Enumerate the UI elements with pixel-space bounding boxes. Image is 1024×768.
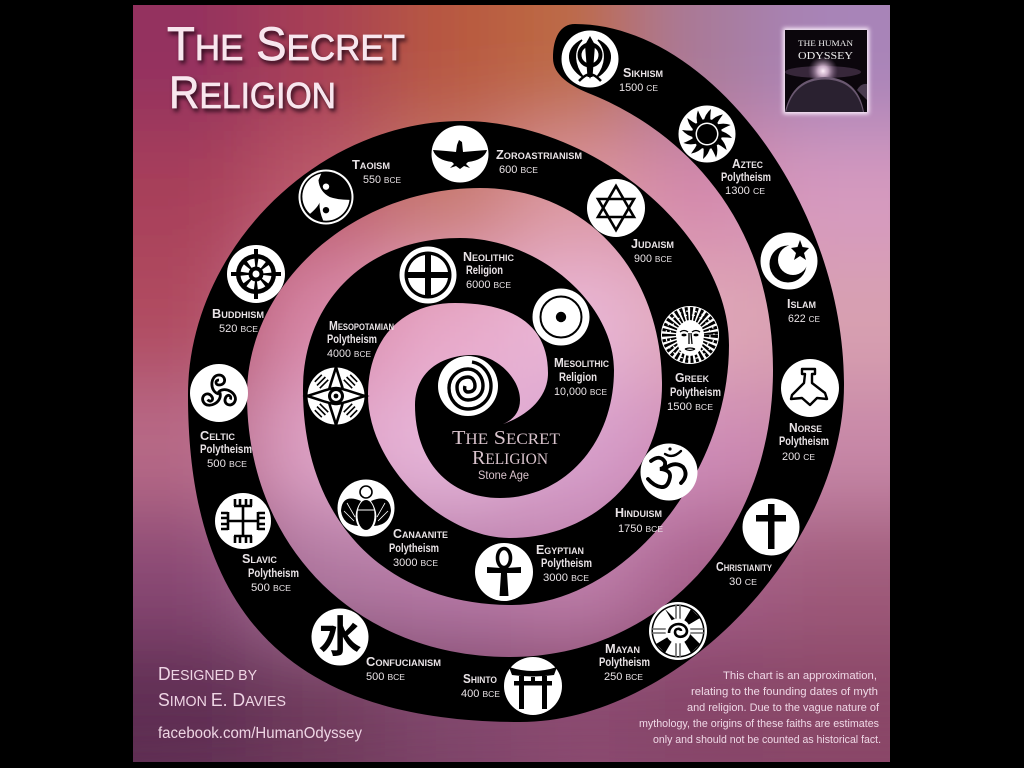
credit: designer: SIMON E. DAVIES bbox=[158, 690, 286, 710]
label: Mesopotamian bbox=[327, 319, 394, 360]
title: RELIGION bbox=[169, 67, 336, 118]
icon: Hindu om bbox=[640, 444, 698, 500]
label: Hinduism bbox=[615, 506, 663, 535]
label: Egyptian bbox=[536, 543, 592, 584]
label: Egyptian: 3000 BCE bbox=[543, 572, 589, 584]
label: Zoroastrianism: 600 BCE bbox=[499, 164, 538, 176]
center heading: Stone Age bbox=[478, 468, 529, 482]
label: Mesolithic: Religion bbox=[559, 372, 597, 384]
logo: The Human Odyssey: ODYSSEY bbox=[798, 51, 853, 62]
label: Islam bbox=[787, 297, 820, 325]
label: Aztec: Aztec bbox=[732, 157, 763, 171]
label: Taoism bbox=[352, 158, 401, 186]
icon: Zoroastrian faravahar bbox=[432, 126, 488, 182]
icon: Star of David bbox=[587, 179, 645, 237]
background panel bbox=[133, 5, 890, 762]
logo: The Human Odyssey: THE HUMAN bbox=[798, 38, 853, 48]
label: Greek: 1500 BCE bbox=[667, 401, 713, 413]
title: THE SECRET bbox=[167, 17, 405, 70]
label: Shinto: Shinto bbox=[463, 672, 497, 686]
icon: Shinto torii gate bbox=[504, 657, 562, 715]
icon: Norse hammer bbox=[781, 359, 839, 417]
label: Zoroastrianism bbox=[496, 148, 582, 176]
label: Canaanite bbox=[389, 527, 448, 569]
label: Judaism bbox=[631, 237, 674, 265]
label: Aztec: Polytheism bbox=[721, 172, 771, 184]
icon: Mesopotamian star bbox=[307, 367, 365, 425]
credit: designer: facebook.com/HumanOdyssey bbox=[158, 725, 362, 742]
credit: designer bbox=[158, 664, 362, 742]
label: Celtic bbox=[200, 429, 252, 470]
label: Aztec bbox=[721, 157, 771, 197]
disclaimer note: and religion. Due to the vague nature of bbox=[687, 702, 880, 714]
label: Mayan: 250 BCE bbox=[604, 671, 643, 683]
label: Shinto: 400 BCE bbox=[461, 688, 500, 700]
icon: Neolithic sun cross bbox=[400, 246, 456, 304]
label: Mesopotamian: Polytheism bbox=[327, 334, 377, 346]
label: Taoism: 550 BCE bbox=[363, 174, 401, 186]
label: Norse: Polytheism bbox=[779, 436, 829, 448]
label: Norse: Norse bbox=[789, 421, 822, 435]
label: Shinto bbox=[461, 672, 500, 700]
credit: designer: DESIGNED BY bbox=[158, 664, 257, 684]
label: Confucianism: Confucianism bbox=[366, 655, 441, 669]
label: Confucianism: 500 BCE bbox=[366, 671, 405, 683]
label: Zoroastrianism: Zoroastrianism bbox=[496, 148, 582, 162]
icon: Christian cross bbox=[742, 498, 800, 556]
label: Slavic: Polytheism bbox=[248, 568, 299, 580]
disclaimer note: This chart is an approximation, bbox=[723, 670, 877, 682]
icon: Aztec sun bbox=[678, 106, 736, 162]
label: Buddhism: 520 BCE bbox=[219, 323, 258, 335]
center heading: THE SECRET bbox=[452, 427, 561, 449]
icon: Mayan hunab ku bbox=[649, 602, 707, 660]
label: Slavic bbox=[242, 552, 299, 594]
disclaimer note: only and should not be counted as historical fact. bbox=[653, 734, 881, 746]
label: Egyptian: Egyptian bbox=[536, 543, 584, 557]
label: Greek: Greek bbox=[675, 371, 709, 385]
label: Christianity: Christianity bbox=[716, 560, 772, 574]
label: Mesopotamian: 4000 BCE bbox=[327, 348, 371, 360]
icon: Egyptian ankh bbox=[475, 543, 533, 601]
label: Hinduism: 1750 BCE bbox=[618, 523, 663, 535]
icon: Sikhism khanda bbox=[562, 30, 618, 88]
label: Mesolithic: Mesolithic bbox=[554, 356, 609, 370]
label: Mesopotamian: Mesopotamian bbox=[329, 319, 394, 333]
icon: Taoist yin yang bbox=[298, 170, 354, 224]
label: Taoism: Taoism bbox=[352, 158, 390, 172]
label: Celtic: Polytheism bbox=[200, 444, 252, 456]
label: Slavic: Slavic bbox=[242, 552, 278, 566]
label: Aztec: 1300 CE bbox=[725, 185, 765, 197]
label: Greek: Polytheism bbox=[670, 387, 721, 399]
label: Mayan: Mayan bbox=[605, 642, 640, 656]
label: Mayan bbox=[599, 642, 650, 683]
label: Neolithic: Neolithic bbox=[463, 250, 514, 264]
logo: The Human Odyssey bbox=[783, 28, 869, 114]
label: Judaism: Judaism bbox=[631, 237, 674, 251]
label: Canaanite: 3000 BCE bbox=[393, 557, 438, 569]
icon: Canaanite scarab bbox=[338, 480, 394, 536]
label: Neolithic: Religion bbox=[466, 265, 503, 277]
icon: Celtic triskele bbox=[190, 364, 248, 422]
label: Buddhism: Buddhism bbox=[212, 307, 264, 321]
disclaimer note bbox=[639, 670, 881, 746]
infographic artwork bbox=[133, 5, 890, 762]
icon: Mesolithic sun disc bbox=[532, 288, 590, 346]
label: Norse: 200 CE bbox=[782, 451, 815, 463]
label: Celtic: Celtic bbox=[200, 429, 236, 443]
icon: Slavic symbol bbox=[215, 493, 271, 549]
title bbox=[167, 17, 405, 118]
label: Islam: 622 CE bbox=[788, 313, 820, 325]
icon: central stone age spiral bbox=[438, 356, 498, 416]
label: Christianity bbox=[716, 560, 772, 588]
label: Sikhism: 1500 CE bbox=[619, 82, 658, 94]
label: Buddhism bbox=[212, 307, 264, 335]
label: Norse bbox=[779, 421, 829, 463]
center heading bbox=[452, 427, 561, 482]
label: Mesolithic bbox=[554, 356, 609, 398]
disclaimer note: mythology, the origins of these faiths are estimates bbox=[639, 718, 879, 730]
icon: Islam crescent and star bbox=[760, 232, 818, 290]
label: Mesolithic: 10,000 BCE bbox=[554, 386, 607, 398]
label: Egyptian: Polytheism bbox=[541, 558, 592, 570]
label: Sikhism: Sikhism bbox=[623, 66, 663, 80]
icon: Confucian water character: 水 bbox=[318, 603, 362, 665]
label: Slavic: 500 BCE bbox=[251, 582, 291, 594]
label: Confucianism bbox=[366, 655, 441, 683]
label: Canaanite: Polytheism bbox=[389, 543, 439, 555]
icon: Buddhist dharma wheel bbox=[227, 245, 285, 303]
label: Judaism: 900 BCE bbox=[634, 253, 672, 265]
label: Celtic: 500 BCE bbox=[207, 458, 247, 470]
label: Sikhism bbox=[619, 66, 663, 94]
label: Greek bbox=[667, 371, 721, 413]
icon: Greek Medusa bbox=[661, 306, 719, 364]
label: Hinduism: Hinduism bbox=[615, 506, 662, 520]
label: Islam: Islam bbox=[787, 297, 816, 311]
disclaimer note: relating to the founding dates of myth bbox=[691, 686, 878, 698]
label: Mayan: Polytheism bbox=[599, 657, 650, 669]
spiral timeline band bbox=[188, 24, 844, 722]
label: Neolithic: 6000 BCE bbox=[466, 279, 511, 291]
label: Christianity: 30 CE bbox=[729, 576, 757, 588]
label: Neolithic bbox=[463, 250, 514, 291]
center heading: RELIGION bbox=[472, 447, 548, 469]
label: Canaanite: Canaanite bbox=[393, 527, 448, 541]
